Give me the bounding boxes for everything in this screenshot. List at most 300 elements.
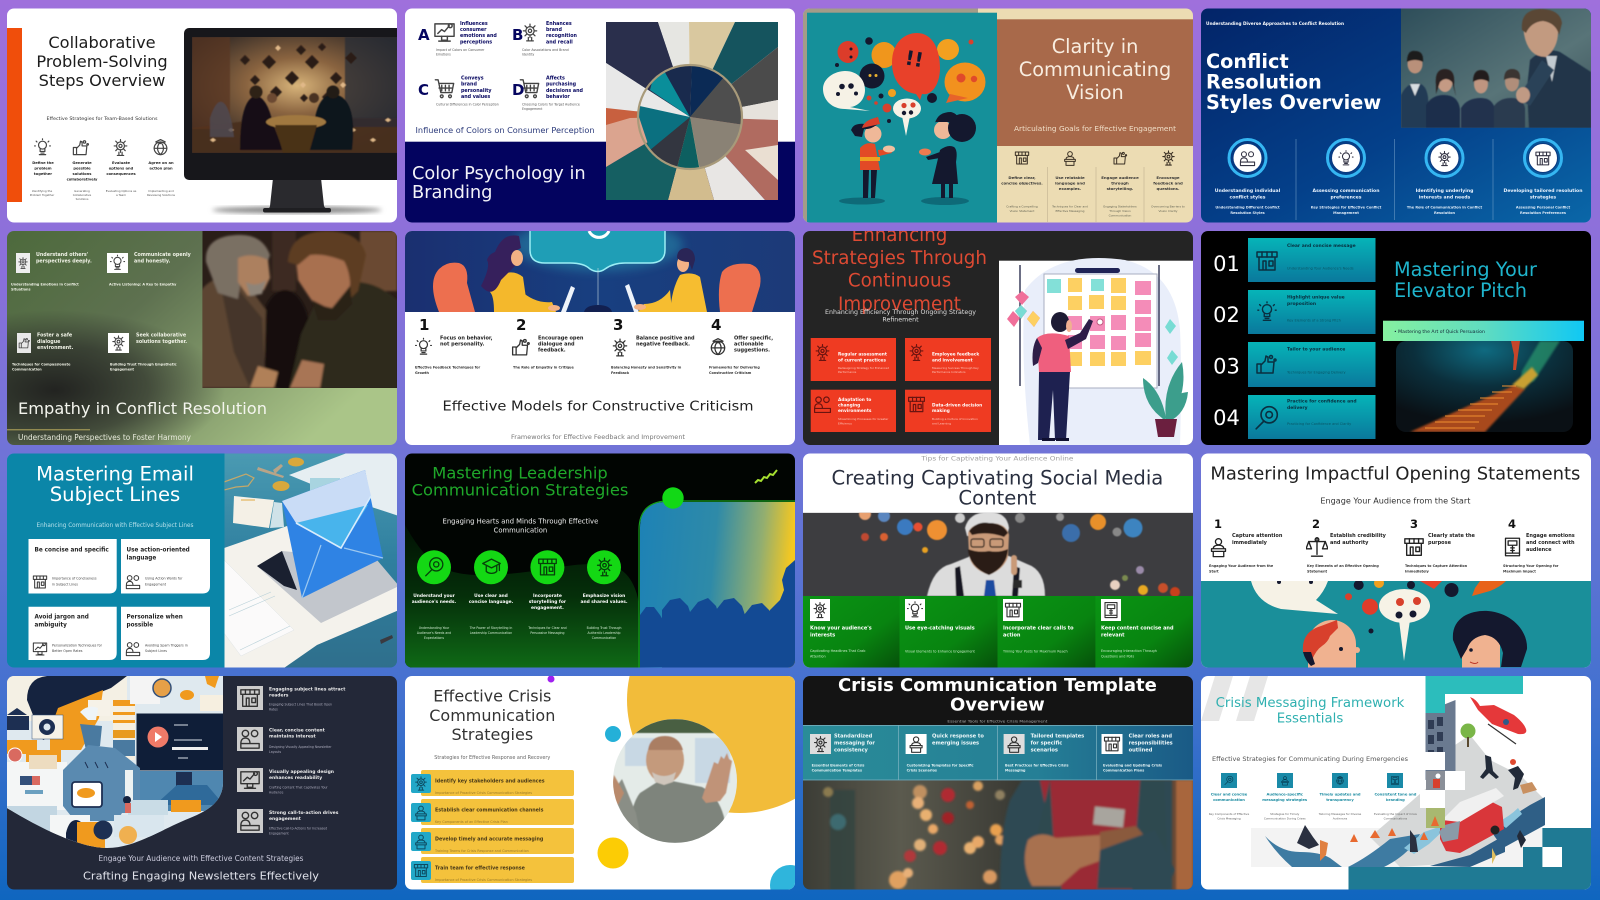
card 2 <box>905 338 991 381</box>
newsletter item 1: Engaging Subject Lines That Boost Open <box>269 702 332 706</box>
item B: Identity <box>522 52 534 56</box>
newsletter item 3: Visually appealing design <box>269 769 334 775</box>
four columns: examples. <box>1059 186 1082 191</box>
steps: Offer specific, <box>734 336 773 342</box>
column sublabels: Assessing Personal Conflict <box>1516 206 1570 210</box>
teal band with four columns: consistency <box>834 748 868 754</box>
tip card 3: Better Open Rates <box>52 649 83 653</box>
tip card 4 <box>121 607 210 660</box>
column labels: conflict styles <box>1230 194 1266 200</box>
four columns: Overcoming Barriers to <box>1151 204 1185 208</box>
steps: Capture attention <box>1232 533 1283 539</box>
newsletter item 3 <box>237 768 334 794</box>
pitch card 1: Clear and concise message <box>1287 243 1356 249</box>
column sublabels: Authentic Leadership <box>588 631 620 635</box>
title: Communication Strategies <box>412 480 628 500</box>
steps: Implementing and <box>148 189 174 193</box>
steps <box>30 139 176 201</box>
item B: Color Associations and Brand <box>522 48 569 52</box>
strategy row 4: Train team for effective response <box>435 866 526 872</box>
title: Mastering Your <box>1394 258 1537 281</box>
empathy item 3: Foster a safe <box>37 332 73 338</box>
photo: man on phone with social icons <box>803 508 1193 597</box>
orange side bar <box>7 28 22 202</box>
subtitle: Understanding Perspectives to Foster Harmony <box>18 433 192 442</box>
slide 8: elevator pitch <box>1201 231 1591 445</box>
subtitle: Enhancing Communication with Effective Subject Lines <box>36 522 194 529</box>
item C: brand <box>461 82 477 88</box>
newsletter item 4 <box>237 809 339 836</box>
empathy item 2 <box>107 252 192 286</box>
illustration: glowing staircase <box>1396 341 1573 432</box>
framework columns: Clear and concise <box>1211 792 1248 796</box>
column sublabels: Techniques for Clear and <box>527 626 567 630</box>
subtitle: Engage Your Audience with Effective Content Strategies <box>98 854 304 863</box>
title: Clarity in <box>1052 35 1138 58</box>
framework columns: transparency <box>1326 798 1354 802</box>
item A: Impact of Colors on Consumer <box>436 48 485 52</box>
item A <box>418 21 497 56</box>
tip card 1: Be concise and specific <box>34 548 109 554</box>
item D: behavior <box>546 94 570 100</box>
four columns: Use relatable <box>1055 175 1085 180</box>
strategy row 1: Importance of Proactive Crisis Communication Strategies <box>435 791 532 795</box>
teal band with four columns: scenarios <box>1031 748 1058 754</box>
framework columns: communication <box>1213 798 1245 802</box>
pitch card 2 <box>1248 290 1376 334</box>
green columns: Know your audience's <box>810 626 872 632</box>
tip card 3: Avoid jargon and <box>34 614 89 620</box>
illustration: mosaic of media icons <box>7 676 224 848</box>
framework columns: Strategies for Timely <box>1270 812 1300 816</box>
newsletter item 1 <box>237 686 346 712</box>
dark teal accent blocks <box>1348 828 1591 890</box>
subtitle: Strategies for Effective Response and Recovery <box>434 755 550 761</box>
green columns <box>803 596 1193 668</box>
item A: A <box>418 26 430 44</box>
column sublabels: Key Strategies for Effective Conflict <box>1311 206 1382 210</box>
title: Crisis Communication Template <box>838 675 1157 696</box>
strategy row 2 <box>411 799 574 825</box>
framework columns: Key Components of Effective <box>1209 812 1249 816</box>
column sublabels: Audience's Needs and <box>417 631 451 635</box>
card 4: Building a Culture of Innovation <box>932 417 978 421</box>
steps: Growth <box>415 371 430 375</box>
cyan dot <box>605 726 621 742</box>
card 3: Streamlining Processes for Greater <box>838 417 889 421</box>
column sublabels: Understanding Your <box>419 626 450 630</box>
column sublabels: Management <box>1333 211 1359 215</box>
newsletter item 2: Designing Visually Appealing Newsletter <box>269 745 332 749</box>
framework columns: Audiences <box>1333 816 1348 820</box>
teal band with four columns: Communication Plans <box>1103 769 1144 773</box>
framework columns: Crisis Messaging <box>1217 816 1241 820</box>
steps: 3 <box>613 316 623 334</box>
subtitle: Refinement <box>882 316 919 324</box>
tip card 4: possible <box>126 622 153 628</box>
steps: Frameworks for Delivering <box>709 366 760 370</box>
tip card 3: Personalization Techniques for <box>52 644 103 648</box>
four columns: questions. <box>1157 186 1180 191</box>
newsletter item 1: readers <box>269 692 289 698</box>
slide 2: color psychology <box>405 8 795 223</box>
card 1: Regular assessment <box>838 352 887 358</box>
steps: Focus on behavior, <box>440 336 493 342</box>
teal band with four columns <box>803 725 1193 780</box>
card 1: of current practices <box>838 358 886 364</box>
colour wheel disc <box>639 66 741 168</box>
subtitle: Essential Tools for Effective Crisis Management <box>947 718 1048 724</box>
pitch card 3: Tailor to your audience <box>1287 346 1345 352</box>
steps: Encourage open <box>538 336 584 342</box>
steps: Problem Together <box>30 193 55 197</box>
steps <box>415 316 773 375</box>
steps: Techniques to Capture Attention <box>1405 564 1468 568</box>
card 1 <box>811 338 896 381</box>
green columns: Incorporate clear calls to <box>1003 626 1074 632</box>
column sublabels: Persuasive Messaging <box>530 631 564 635</box>
card 3: Adaptation to <box>838 397 871 403</box>
title: Crafting Engaging Newsletters Effectively <box>83 870 320 882</box>
green columns: Questions and Polls <box>1101 654 1134 658</box>
green columns: Timing Your Posts for Maximum Reach <box>1002 650 1068 654</box>
title: Collaborative <box>48 33 156 52</box>
strategy row 2: Key Components of an Effective Crisis Plan <box>435 820 508 824</box>
column labels: preferences <box>1330 194 1362 200</box>
four columns: through <box>1111 180 1129 186</box>
steps: purpose <box>1428 540 1452 546</box>
pitch card 4: delivery <box>1287 405 1308 411</box>
steps: Clearly state the <box>1428 533 1476 539</box>
illustration: people and speech bubbles <box>807 13 997 223</box>
empathy item 1: Understanding Emotions in Conflict <box>11 282 79 286</box>
steps: 1 <box>419 316 429 334</box>
framework columns: Consistent tone and <box>1374 792 1417 796</box>
item A: Emotions <box>436 52 451 56</box>
column labels: Understand your <box>413 593 456 599</box>
steps: 4 <box>711 316 721 334</box>
steps: Solutions <box>76 197 89 201</box>
column labels: interests and needs <box>1419 194 1471 200</box>
card 3: environments <box>838 408 872 414</box>
column labels: strategies <box>1530 194 1556 200</box>
eyebrow: Tips for Captivating Your Audience Online <box>920 456 1074 462</box>
framework columns: branding <box>1386 798 1405 802</box>
strategy row 3 <box>411 828 574 854</box>
steps: feedback. <box>538 348 566 354</box>
tip card 3: ambiguity <box>34 622 67 628</box>
empathy item 3: dialogue <box>37 339 61 345</box>
steps: Engage emotions <box>1526 533 1575 539</box>
steps: Effective Feedback Techniques for <box>415 366 481 370</box>
green columns: Captivating Headlines That Grab <box>810 649 865 653</box>
empathy item 2: and honestly. <box>134 258 171 264</box>
steps: a Team <box>116 193 126 197</box>
steps: Engaging Your Audience from the <box>1209 564 1274 568</box>
newsletter item 3: Audience <box>269 790 283 794</box>
tip card 4: Avoiding Spam Triggers in <box>145 644 188 648</box>
column sublabels: Communication <box>592 636 616 640</box>
column labels: concise language. <box>469 599 514 605</box>
steps: audience <box>1526 547 1552 553</box>
item D: Affects <box>546 76 565 82</box>
empathy item 3: Techniques for Compassionate <box>12 362 71 366</box>
subtitle: Effective Strategies for Team-Based Solutions <box>46 116 158 122</box>
yellow dot <box>598 838 628 868</box>
steps: dialogue and <box>538 342 575 348</box>
teal band with four columns: outlined <box>1129 748 1153 754</box>
column sublabels: Resolution Styles <box>1230 211 1265 215</box>
card 3: Efficiency <box>838 421 852 425</box>
card 2: Measuring Success Through Key <box>932 366 979 370</box>
steps: Balancing Honesty and Sensitivity in <box>611 366 682 370</box>
title: Essentials <box>1277 712 1343 727</box>
purple dot <box>548 676 554 682</box>
slide 6: constructive criticism <box>405 219 795 445</box>
card 4: Data-driven decision <box>932 402 982 408</box>
pitch card 3 <box>1248 342 1376 387</box>
card 4: making <box>932 408 950 414</box>
newsletter item 4: Effective Call-to-Actions for Increased <box>269 826 327 830</box>
steps: Evaluate <box>112 161 131 165</box>
subtitle: Engage Your Audience from the Start <box>1320 496 1470 506</box>
framework columns: Timely updates and <box>1320 792 1361 796</box>
four columns: language and <box>1055 180 1085 186</box>
title: Overview <box>950 694 1045 716</box>
steps: Key Elements of an Effective Opening <box>1307 564 1379 568</box>
teal band with four columns: Standardized <box>834 734 873 740</box>
tip card 1: in Subject Lines <box>52 582 78 586</box>
title: Resolution <box>1206 70 1322 94</box>
slide 11: social media content <box>803 454 1193 668</box>
title: Elevator Pitch <box>1394 279 1527 302</box>
strategy row 4: Importance of Proactive Crisis Communication Strategies <box>435 878 532 882</box>
four columns: Crafting a Compelling <box>1006 204 1038 208</box>
subtitle: Engaging Hearts and Minds Through Effective <box>443 518 598 526</box>
illustration: people and speech bubbles: !! <box>903 45 925 72</box>
item D: D <box>512 81 524 99</box>
steps: Balance positive and <box>636 336 695 342</box>
item B: B <box>512 26 523 44</box>
steps: Define the <box>32 161 54 165</box>
green columns: Visual Elements to Enhance Engagement <box>905 650 976 654</box>
card 2: Performance Indicators <box>932 370 966 374</box>
item D: purchasing <box>546 82 577 88</box>
right image panel <box>639 501 795 668</box>
green columns: Use eye-catching visuals <box>905 626 975 632</box>
photo: crossed arms with bokeh lights <box>803 780 1193 890</box>
illustration: emergency scene <box>1251 697 1545 867</box>
framework columns: Audience-specific <box>1266 792 1303 796</box>
empathy item 4 <box>108 332 187 372</box>
column sublabels: Building Trust Through <box>587 626 621 630</box>
newsletter item 2: Layouts <box>269 750 282 754</box>
steps: together <box>34 172 52 176</box>
yellow blob <box>627 587 853 813</box>
four columns: Vision Statement <box>1010 209 1035 213</box>
item A: Influences <box>460 21 488 27</box>
newsletter item 4: Engagement <box>269 832 290 836</box>
title: Subject Lines <box>50 483 180 506</box>
item C: personality <box>461 88 492 94</box>
photo: two men talking <box>196 231 397 390</box>
empathy item 1: Situations <box>11 288 30 292</box>
framework columns: Communications <box>1384 816 1408 820</box>
item B: and recall <box>546 40 573 46</box>
title: Mastering Leadership <box>432 464 608 482</box>
card 1: Performance <box>838 370 857 374</box>
title: Strategies Through <box>812 248 987 269</box>
title: Mastering Impactful Opening Statements <box>1210 464 1580 484</box>
tip card 2: Engagement <box>145 582 167 586</box>
card 3 <box>811 390 896 432</box>
title: Effective Models for Constructive Criticism <box>442 398 754 414</box>
steps: and connect with <box>1526 540 1575 546</box>
pitch card 2: proposition <box>1287 301 1316 307</box>
four columns: Define clear, <box>1008 175 1036 180</box>
column sublabels: Resolution <box>1434 211 1456 215</box>
strategy row 3: Develop timely and accurate messaging <box>435 836 544 842</box>
steps: Evaluating Options as <box>106 189 137 193</box>
teal band with four columns: Crisis Scenarios <box>907 769 937 773</box>
subtitle: Articulating Goals for Effective Engagement <box>1014 125 1176 133</box>
framework columns <box>1209 773 1417 820</box>
column labels: engagement. <box>531 605 564 611</box>
strategy row 1 <box>411 770 574 796</box>
empathy item 4: Seek collaborative <box>136 332 187 338</box>
title: Branding <box>412 182 492 203</box>
item D: Choosing Colors for Target Audience <box>522 102 580 106</box>
steps: and authority <box>1330 540 1369 546</box>
item C: and values <box>461 94 490 100</box>
persuasion bar <box>1383 321 1584 341</box>
steps: suggestions. <box>734 348 770 354</box>
item A: perceptions <box>460 40 492 46</box>
subtitle: Enhancing Efficiency Through Ongoing Strategy <box>825 309 976 316</box>
framework columns: messaging strategies <box>1262 798 1308 802</box>
column sublabels: Resolution Preferences <box>1520 211 1566 215</box>
title: Continuous <box>848 271 951 292</box>
empathy item 3: Communication <box>12 368 42 372</box>
column sublabels: Expectations <box>424 636 444 640</box>
newsletter item 2: Clear, concise content <box>269 728 326 734</box>
four columns: feedback and <box>1153 180 1183 186</box>
column labels: audience's needs. <box>412 599 457 605</box>
four columns: Engage audience <box>1101 175 1139 180</box>
four columns: Techniques for Clear and <box>1051 204 1088 208</box>
teal band with four columns: Messaging <box>1005 769 1026 773</box>
strategy row 1: Identify key stakeholders and audiences <box>435 778 545 784</box>
card 2: and involvement <box>932 358 973 364</box>
green columns: Attention <box>810 654 826 658</box>
teal accent blocks <box>1426 676 1523 713</box>
steps: solutions <box>72 172 92 176</box>
slide 13: engaging newsletters <box>7 676 397 890</box>
empathy item 3 <box>12 332 73 372</box>
column labels: Use clear and <box>474 593 508 599</box>
green columns: Encouraging Interaction Through <box>1101 649 1157 653</box>
column sublabels: Understanding Different Conflict <box>1215 206 1280 210</box>
step numbers: 01 <box>1213 252 1240 276</box>
card 4: and Learning <box>932 421 951 425</box>
teal band with four columns: messaging for <box>834 740 875 746</box>
empathy item 1: perspectives deeply. <box>36 258 92 264</box>
column sublabels: Leadership Communication <box>470 631 512 635</box>
steps: Start <box>1209 570 1219 574</box>
item B: Enhances <box>546 21 572 27</box>
item B <box>512 21 577 56</box>
title: Communicating <box>1019 58 1171 81</box>
subtitle: Communication <box>494 526 547 534</box>
desktop monitor photo <box>184 28 404 214</box>
green wave <box>405 525 640 668</box>
newsletter item 4: Strong call-to-action drives <box>269 810 339 816</box>
strategy row 2: Establish clear communication channels <box>435 808 544 814</box>
title: Mastering Email <box>36 463 194 486</box>
steps: The Role of Empathy in Critique <box>513 366 574 370</box>
steps: Feedback <box>611 371 630 375</box>
column dividers <box>1296 139 1493 220</box>
subtitle: Frameworks for Effective Feedback and Improvement <box>511 434 686 441</box>
tip card 2: Use action-oriented <box>126 548 190 554</box>
tip card 3 <box>28 607 117 660</box>
teal band with four columns: Quick response to <box>932 734 984 740</box>
item B: recognition <box>546 33 577 39</box>
slide 3: clarity in communicating vision <box>803 8 1193 223</box>
slide 9: email subject lines <box>7 453 399 668</box>
column labels: Incorporate <box>533 593 562 599</box>
item C: Conveys <box>461 76 484 82</box>
subtitle: Effective Strategies for Communicating During Emergencies <box>1212 756 1408 763</box>
column labels: Identifying underlying <box>1416 188 1473 194</box>
newsletter item 3: enhances readability <box>269 775 322 781</box>
pitch card 4: Practice for confidence and <box>1287 398 1357 404</box>
teal band with four columns: Customizing Templates for Specific <box>907 764 974 768</box>
column labels: Assessing communication <box>1313 188 1379 194</box>
illustration: two people at laptops <box>405 219 795 312</box>
card 4 <box>905 390 991 432</box>
four columns: Encourage <box>1156 175 1180 180</box>
teal band with four columns: Tailored templates <box>1031 734 1084 740</box>
pitch card 3: Techniques for Engaging Delivery <box>1286 370 1346 374</box>
steps: 1 <box>1214 517 1222 531</box>
illustration: cropped people and bubbles <box>1201 578 1591 670</box>
teal band with four columns: Essential Elements of Crisis <box>812 764 864 768</box>
cyan corner dot <box>770 865 810 900</box>
steps: problem <box>34 166 52 170</box>
title: Steps Overview <box>39 71 165 90</box>
item B: brand <box>546 27 562 33</box>
navy band <box>405 142 795 223</box>
title: Conflict <box>1206 50 1289 73</box>
four columns: Effective Messaging <box>1056 209 1085 213</box>
tip card 2: language <box>126 556 156 562</box>
tip card 1: Importance of Conciseness <box>52 576 97 580</box>
tip card 1 <box>28 539 117 594</box>
icon rings <box>1229 140 1562 176</box>
newsletter item 2: maintains interest <box>269 734 317 740</box>
column labels: Emphasize vision <box>583 593 625 599</box>
column labels: storytelling for <box>529 599 567 605</box>
step numbers: 02 <box>1213 303 1240 327</box>
empathy item 1 <box>11 252 92 292</box>
pitch card 1: Understanding Your Audience's Needs <box>1287 266 1354 270</box>
steps: 2 <box>1312 517 1320 531</box>
steps: Agree on an <box>148 161 174 165</box>
teal band with four columns: for specific <box>1031 740 1062 746</box>
slide 14: crisis communication strategies <box>405 587 853 900</box>
steps: Statement <box>1307 570 1328 574</box>
